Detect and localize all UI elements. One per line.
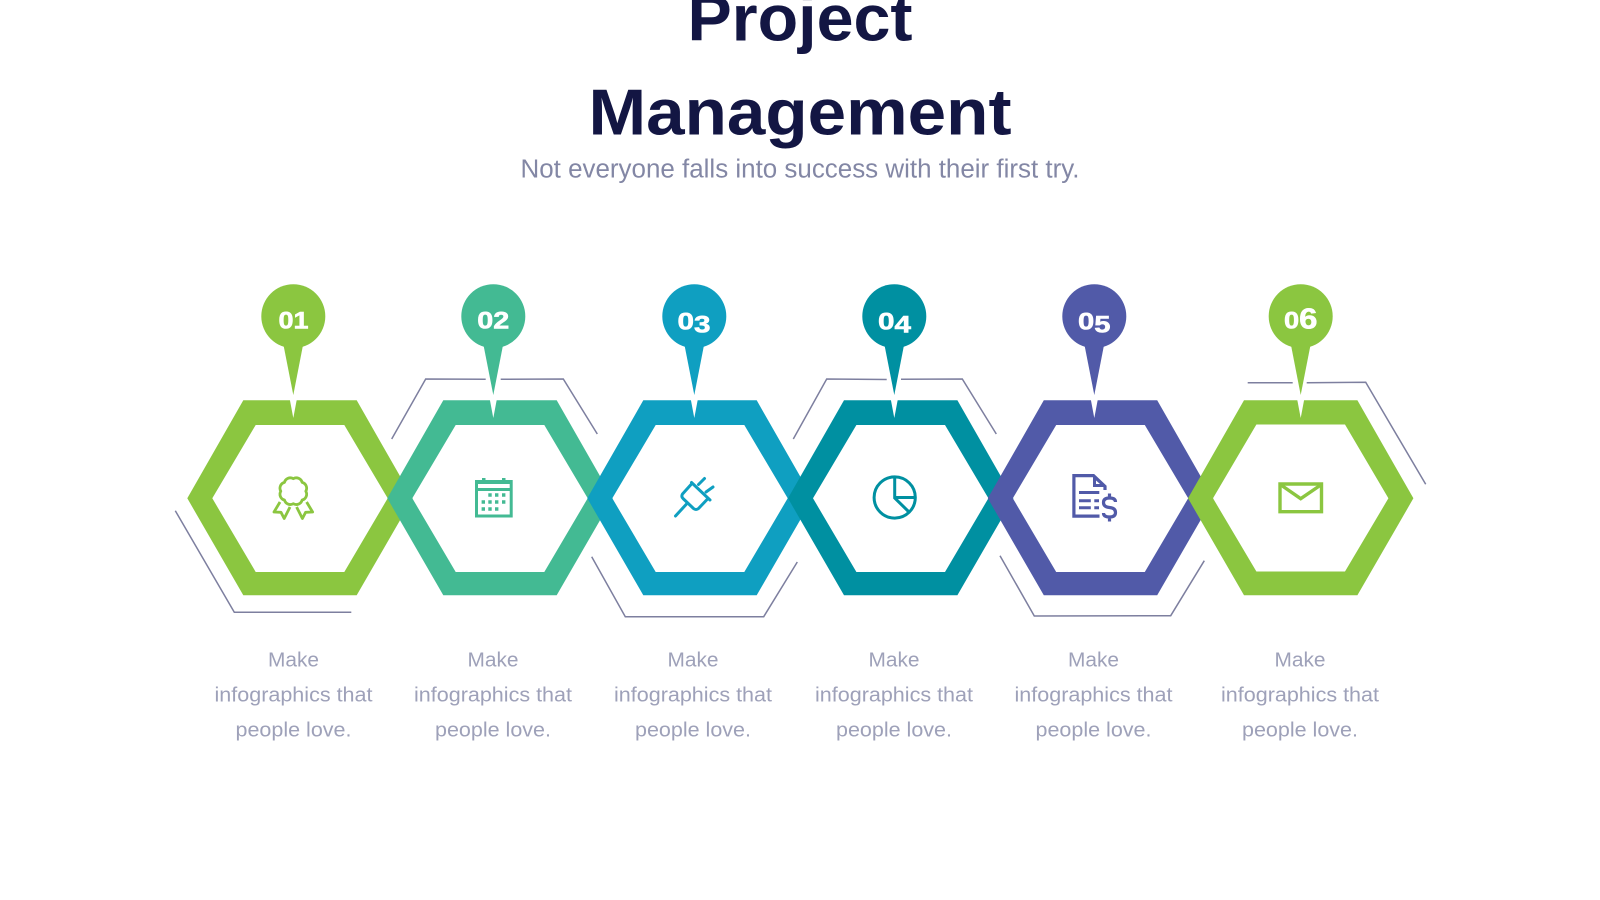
number 03: 0	[678, 308, 691, 335]
caption 3	[614, 650, 772, 742]
connector outline: step 2	[392, 379, 597, 439]
connector outline: step 3	[592, 557, 797, 617]
hexagon 6	[1188, 400, 1413, 595]
pin 3	[662, 284, 726, 395]
hexagon 1	[187, 400, 413, 595]
connector outline: step 4	[793, 379, 996, 439]
caption 2: infographics that	[414, 684, 572, 706]
step 5	[988, 284, 1213, 595]
step 4	[788, 284, 1013, 595]
caption 5: Make	[1068, 650, 1119, 672]
hexagon 5	[988, 400, 1213, 595]
notch 2	[490, 400, 497, 418]
caption 4: infographics that	[815, 684, 973, 706]
icon: plug	[676, 478, 713, 516]
hexagon 2	[387, 400, 613, 595]
caption 3: people love.	[635, 720, 751, 742]
caption 5: infographics that	[1014, 684, 1173, 706]
number 02: 02	[477, 308, 509, 334]
number 05: 5	[1094, 311, 1110, 338]
caption 6	[1221, 650, 1379, 742]
notch 4	[891, 400, 898, 418]
title	[588, 0, 1012, 148]
icon: calendar	[475, 478, 513, 518]
step 2	[387, 284, 613, 595]
step 6	[1188, 284, 1413, 595]
caption 4	[815, 650, 973, 742]
pin 1	[261, 284, 325, 395]
caption 6: people love.	[1242, 720, 1358, 742]
caption 4: people love.	[836, 720, 952, 742]
icon: pie chart	[874, 477, 916, 518]
caption 5	[1014, 650, 1173, 742]
subtitle: Not everyone falls into success with their first try.	[520, 156, 1080, 184]
number 01: 01	[278, 308, 308, 334]
caption 3: infographics that	[614, 684, 772, 706]
title: Management	[588, 75, 1012, 148]
icon: invoice with dollar	[1074, 475, 1116, 522]
caption 6: infographics that	[1221, 684, 1379, 706]
caption 1	[214, 650, 373, 742]
hexagon 3	[587, 400, 813, 595]
caption 2: people love.	[435, 720, 551, 742]
caption 1: people love.	[236, 720, 352, 742]
pin 5	[1062, 284, 1126, 395]
number 03: 3	[694, 311, 710, 338]
caption 3: Make	[668, 650, 718, 672]
number 06: 06	[1284, 303, 1318, 335]
hexagon 4	[788, 400, 1013, 595]
caption 4: Make	[868, 650, 920, 672]
notch 3	[691, 400, 698, 418]
number 05: 0	[1078, 308, 1091, 335]
notch 5	[1091, 400, 1098, 418]
icon: envelope	[1280, 484, 1322, 512]
step 1	[187, 284, 413, 595]
number 04: 0	[878, 308, 891, 335]
pin 6	[1269, 284, 1333, 395]
number 04: 4	[894, 311, 912, 338]
connector outline: step 1	[175, 511, 351, 612]
connector outline: step 6	[1248, 382, 1426, 484]
pin 4	[862, 284, 926, 395]
caption 5: people love.	[1036, 720, 1152, 742]
step 3	[587, 284, 813, 595]
caption 1: infographics that	[214, 684, 373, 706]
notch 1	[290, 400, 297, 418]
connector outline: step 5	[1000, 556, 1204, 616]
pin 2	[461, 284, 525, 395]
caption 2	[414, 650, 572, 742]
notch 6	[1297, 400, 1304, 418]
caption 2: Make	[468, 650, 518, 672]
caption 6: Make	[1274, 650, 1326, 672]
caption 1: Make	[268, 650, 319, 672]
icon: award ribbon	[274, 478, 313, 518]
